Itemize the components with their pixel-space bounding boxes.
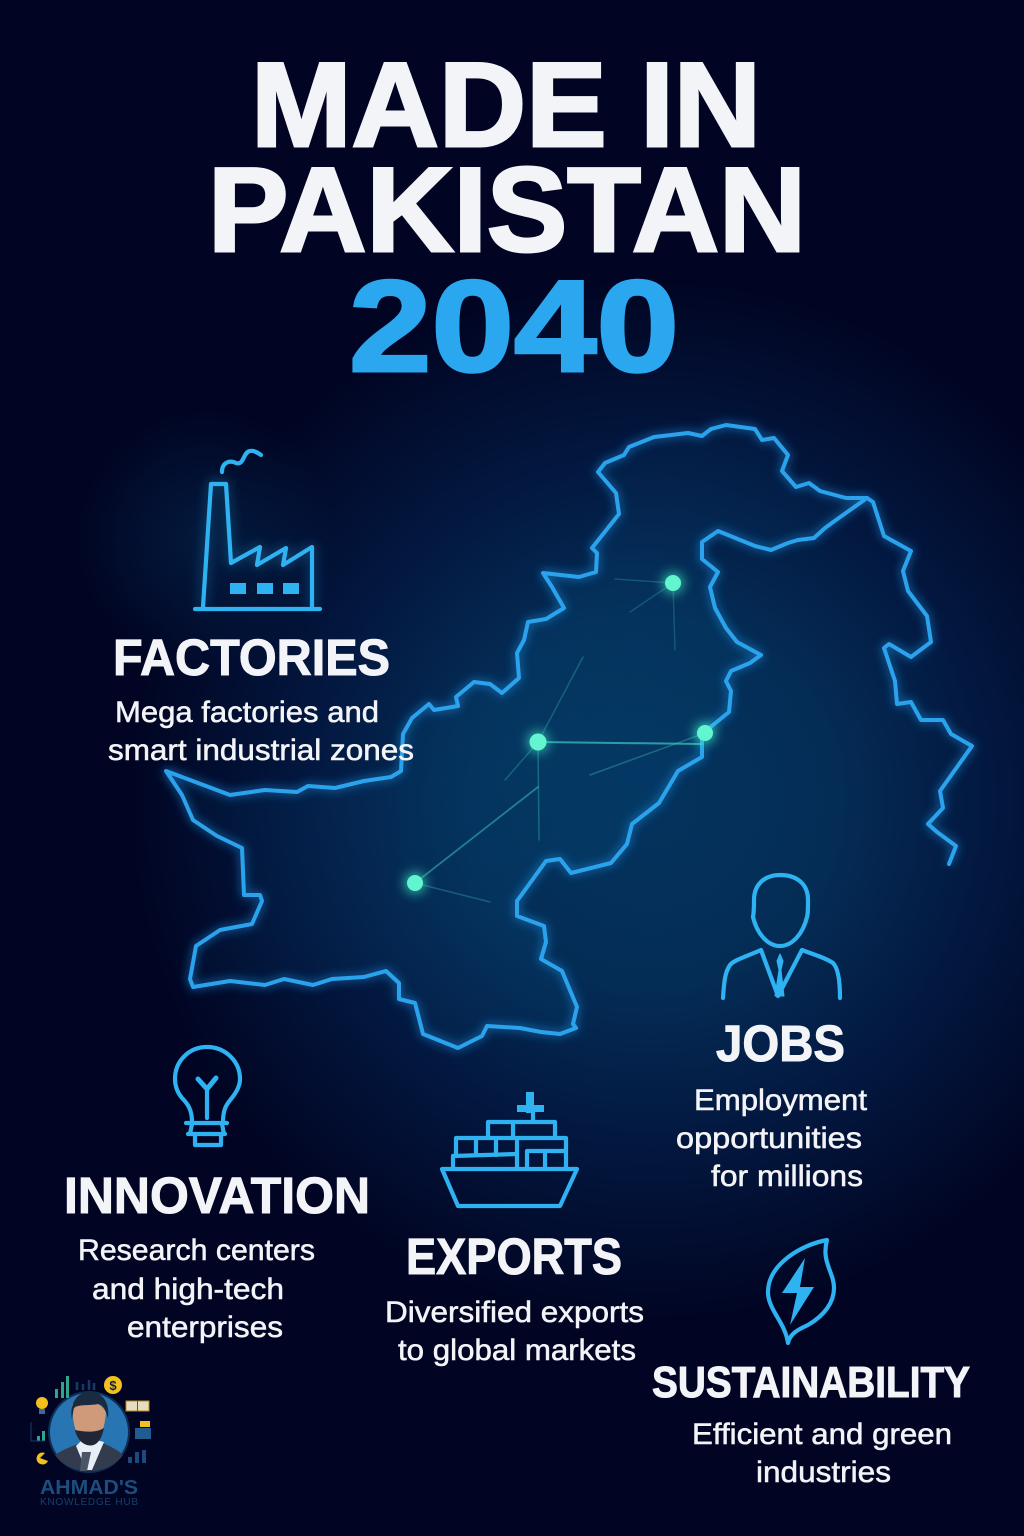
text: innovation description: enterprises (127, 1311, 283, 1344)
text: jobs description: for millions (711, 1160, 863, 1193)
text: exports description (385, 1296, 644, 1367)
panel: sustainability (652, 1240, 970, 1489)
map of Pakistan (166, 425, 972, 1048)
text: sustainability description: industries (756, 1456, 891, 1489)
title: 2040 (349, 253, 679, 399)
text: sustainability description: Efficient and green (692, 1418, 952, 1451)
heading: jobs: JOBS (716, 1015, 845, 1072)
network connections (415, 579, 705, 902)
panel: exports (385, 1092, 644, 1367)
heading: sustainability: SUSTAINABILITY (652, 1358, 970, 1407)
map outline (166, 425, 972, 1048)
network nodes (405, 573, 715, 893)
logo wordmark (40, 1477, 138, 1508)
heading: factories: FACTORIES (113, 629, 390, 686)
map outline glow (166, 425, 972, 1048)
logo icons: $ (109, 1378, 117, 1393)
text: jobs description (676, 1084, 868, 1193)
icon: light bulb (175, 1047, 240, 1145)
panel: innovation (64, 1047, 370, 1344)
panel: factories (108, 451, 414, 767)
text: exports description: Diversified exports (385, 1296, 644, 1329)
text: jobs description: Employment (694, 1084, 868, 1117)
title: PAKISTAN (208, 143, 806, 277)
text: exports description: to global markets (398, 1334, 636, 1367)
icon: person in suit (723, 875, 840, 998)
logo wordmark: AHMAD'S (40, 1477, 138, 1499)
text: factories description: Mega factories and (115, 696, 379, 729)
panel: jobs (676, 875, 868, 1193)
logo portrait (48, 1391, 130, 1473)
title: MADE IN (251, 38, 761, 172)
heading: innovation: INNOVATION (64, 1167, 370, 1224)
text: jobs description: opportunities (676, 1122, 862, 1155)
icon: leaf with lightning bolt (768, 1240, 834, 1343)
text: factories description (108, 696, 414, 767)
icon: factory (195, 451, 320, 609)
text: innovation description: and high-tech (92, 1273, 284, 1306)
map fill (166, 425, 867, 1048)
text: innovation description (78, 1234, 315, 1344)
text: sustainability description (692, 1418, 952, 1489)
title (208, 38, 806, 399)
heading: exports: EXPORTS (406, 1228, 622, 1285)
text: factories description: smart industrial zones (108, 734, 414, 767)
logo: Ahmad's Knowledge Hub (31, 1376, 151, 1508)
icon: cargo ship (442, 1092, 577, 1206)
text: innovation description: Research centers (78, 1234, 315, 1267)
logo wordmark: KNOWLEDGE HUB (40, 1497, 138, 1508)
